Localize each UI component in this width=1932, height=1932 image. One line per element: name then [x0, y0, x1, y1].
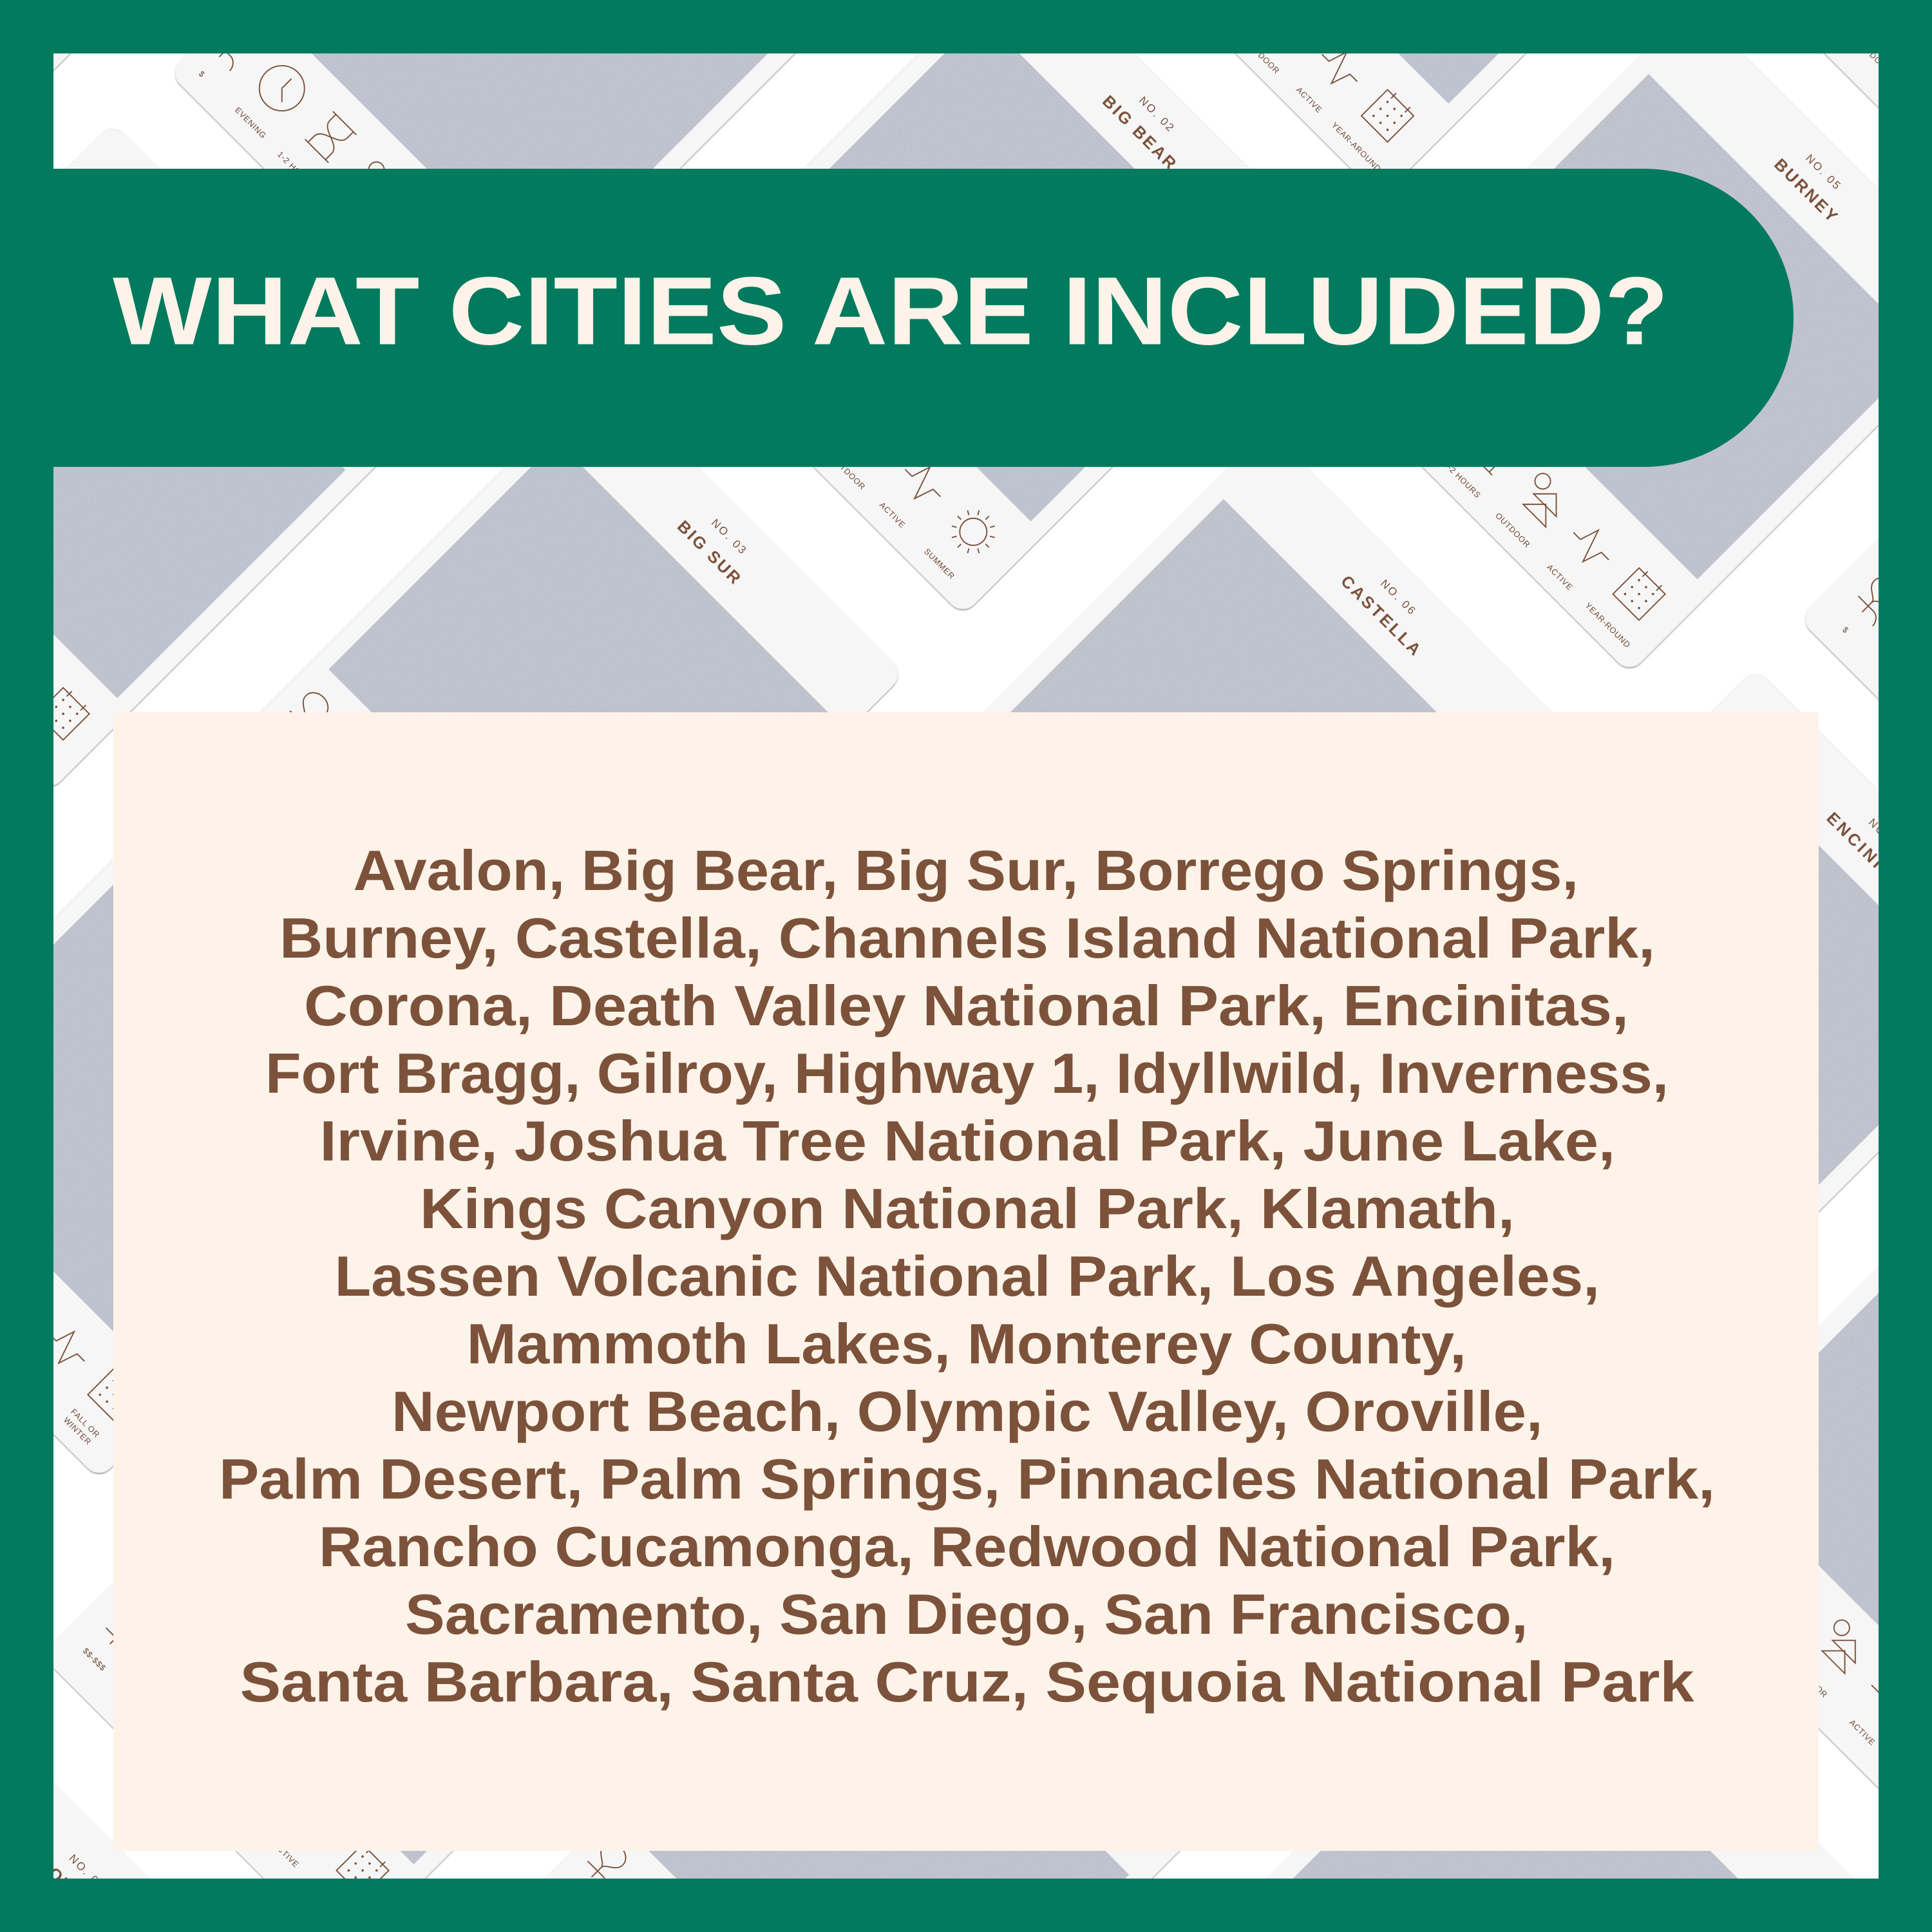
icon: calendar: [88, 1366, 143, 1421]
icon: pulse: [895, 456, 950, 511]
icon: calendar: [336, 1842, 392, 1897]
card: Castella: [900, 428, 1572, 1100]
card number: NO. 03: [709, 516, 750, 558]
card: bottom centre: [535, 1533, 1194, 1926]
label: active: ACTIVE: [1848, 1718, 1877, 1747]
icon: sun: [942, 500, 1005, 563]
label: evening: EVENING: [233, 106, 268, 140]
text block: city list: Newport Beach, Olympic Valley, Oroville,: [392, 1379, 1543, 1443]
panel: list of cities: [113, 712, 1819, 1851]
label: price: $: [1841, 625, 1850, 635]
text block: city list: Sacramento, San Diego, San Francisco,: [405, 1582, 1528, 1646]
card: Big Bear: [659, 0, 1331, 617]
text block: city list: Corona, Death Valley National Park, Encinitas,: [304, 974, 1629, 1037]
label: summer: SUMMER: [922, 547, 956, 581]
card name: BURNEY: [1770, 155, 1841, 225]
banner: green heading band: [53, 169, 1794, 467]
icon: pulse: [1312, 41, 1367, 95]
label: active: ACTIVE: [1545, 563, 1575, 592]
icon: clock: [250, 57, 314, 120]
label: price: $: [197, 70, 207, 79]
label: year-around: YEAR-AROUND: [1330, 120, 1383, 174]
icon: pulse: [1564, 519, 1618, 574]
card: fall or winter, left edge: [0, 809, 467, 1481]
card number: NO. 02: [1137, 94, 1178, 135]
label: outdoor: OUTDOOR: [1791, 1661, 1829, 1700]
label: outdoor: OUTDOOR: [1493, 511, 1532, 549]
text block: city list: [219, 838, 1715, 1714]
text block: city list: Palm Desert, Palm Springs, Pinnacles National Park,: [219, 1447, 1715, 1511]
text block: city list: Kings Canyon National Park, Klamath,: [420, 1177, 1515, 1240]
card: year-around, top: [1077, 0, 1748, 199]
text block: city list: Rancho Cucamonga, Redwood National Park,: [319, 1515, 1615, 1578]
card: outdoor, right edge: [1618, 1160, 1932, 1832]
card: corner sliver: [0, 0, 366, 126]
icon: calendar: [37, 685, 92, 740]
card name: BIG SUR: [674, 517, 744, 588]
label: active: ACTIVE: [878, 500, 907, 530]
text block: city list: Irvine, Joshua Tree National Park, June Lake,: [319, 1109, 1615, 1173]
card: outdoor, top right: [1733, 0, 1932, 267]
text block: city list: Mammoth Lakes, Monterey County,: [467, 1312, 1466, 1376]
card: evening, top left: [168, 0, 839, 377]
icon: calendar: [1361, 87, 1416, 142]
label: duration: 1-2 HOURS: [276, 150, 316, 191]
label: active: ACTIVE: [1294, 86, 1324, 115]
icon: price: [1850, 573, 1904, 626]
card: price, right edge: [1798, 252, 1932, 923]
text block: city list: Santa Barbara, Santa Cruz, Sequoia National Park: [240, 1650, 1695, 1714]
icon: person: [350, 159, 406, 216]
label: active: ACTIVE: [271, 1840, 301, 1870]
label: price range: $$-$$$: [81, 1646, 108, 1673]
card name: BIG BEAR: [1099, 92, 1180, 173]
icon: hourglass: [1469, 424, 1520, 475]
icon: calendar: [1613, 565, 1668, 620]
icon: pulse: [39, 1320, 94, 1375]
icon: person: [1516, 470, 1573, 527]
icon: pulse: [1862, 1672, 1917, 1727]
card name: CASTELLA: [1337, 573, 1424, 659]
label: fall or winter: WINTER: [62, 1416, 93, 1447]
title: WHAT CITIES ARE INCLUDED?: [113, 256, 1669, 365]
icon: price: [98, 1604, 152, 1658]
card: calendar, left edge: [0, 122, 417, 794]
card: Encinitas: [1388, 667, 1932, 1339]
icon: price: [207, 17, 261, 71]
text block: city list: Burney, Castella, Channels Island National Park,: [279, 906, 1655, 970]
card number: NO. 06: [1378, 577, 1419, 618]
label: duration: 1-2 HOURS: [1442, 460, 1482, 500]
icon: price: [580, 1837, 633, 1891]
card: price range, lower left: [47, 1294, 705, 1926]
card: bottom left corner: [0, 1719, 195, 1926]
label: outdoor: OUTDOOR: [829, 453, 867, 492]
label: fall or winter: FALL OR: [69, 1407, 102, 1439]
label: year-round: YEAR-ROUND: [1584, 601, 1632, 650]
text block: city list: Avalon, Big Bear, Big Sur, Borrego Springs,: [353, 838, 1578, 902]
card: Burney: [1325, 3, 1932, 675]
text block: city list: Lassen Volcanic National Park, Los Angeles,: [335, 1244, 1600, 1308]
icon: price: [282, 687, 336, 741]
card number: NO. 05: [1803, 151, 1844, 193]
icon: hourglass: [305, 111, 356, 163]
card: bottom right: [1221, 1591, 1857, 1926]
card: Big Sur: [234, 370, 905, 1042]
icon: person: [1815, 1617, 1871, 1674]
text block: city list: Fort Bragg, Gilroy, Highway 1, Idyllwild, Inverness,: [265, 1041, 1669, 1105]
